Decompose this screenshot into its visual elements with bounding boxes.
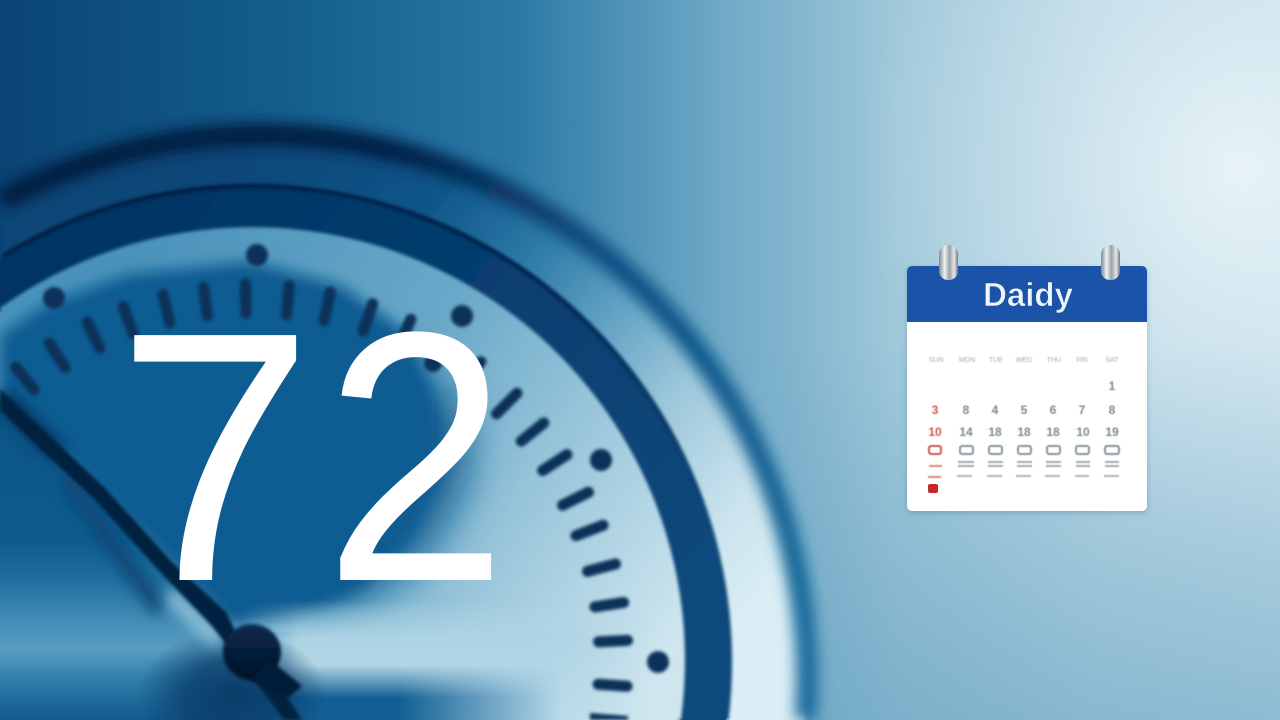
calendar dates — [928, 379, 1119, 439]
clock hour dots — [43, 244, 669, 673]
calendar dates: 3 — [932, 403, 939, 417]
calendar garbled rows — [928, 446, 1119, 477]
clock face — [0, 227, 685, 720]
calendar weekday labels: FRI — [1076, 357, 1088, 364]
clock hand — [0, 389, 302, 720]
calendar icon — [907, 245, 1147, 511]
calendar weekday labels: SUN — [929, 357, 943, 364]
calendar title: Daidy — [983, 276, 1074, 313]
big number 72 — [116, 258, 508, 656]
calendar dates: 7 — [1079, 403, 1086, 417]
calendar dates: 14 — [959, 425, 973, 439]
calendar weekday labels: SAT — [1105, 357, 1119, 364]
calendar weekday labels: WED — [1016, 357, 1032, 364]
calendar dates: 18 — [1046, 425, 1060, 439]
clock minute ticks — [16, 284, 628, 720]
big number 72: 7 — [116, 259, 314, 656]
calendar dates: 18 — [988, 425, 1002, 439]
calendar weekday labels: THU — [1047, 357, 1061, 364]
calendar binding rings — [939, 245, 1120, 280]
calendar dates: 18 — [1017, 425, 1031, 439]
calendar dates: 6 — [1050, 403, 1057, 417]
calendar red date marker — [928, 484, 938, 493]
calendar dates: 8 — [963, 403, 970, 417]
calendar dates: 1 — [1109, 379, 1116, 393]
calendar page — [907, 266, 1147, 511]
calendar dates: 10 — [928, 425, 942, 439]
calendar dates: 19 — [1105, 425, 1119, 439]
clock bezel — [0, 134, 807, 720]
calendar header — [907, 266, 1147, 322]
calendar dates: 10 — [1076, 425, 1090, 439]
calendar weekday labels — [929, 357, 1119, 364]
calendar weekday labels: MON — [959, 357, 975, 364]
calendar weekday labels: TUE — [989, 357, 1003, 364]
clock — [0, 134, 807, 720]
calendar dates: 5 — [1021, 403, 1028, 417]
clock dark ring — [0, 185, 732, 720]
calendar dates: 4 — [992, 403, 999, 417]
big number 72: 2 — [324, 258, 508, 656]
calendar dates: 8 — [1109, 403, 1116, 417]
